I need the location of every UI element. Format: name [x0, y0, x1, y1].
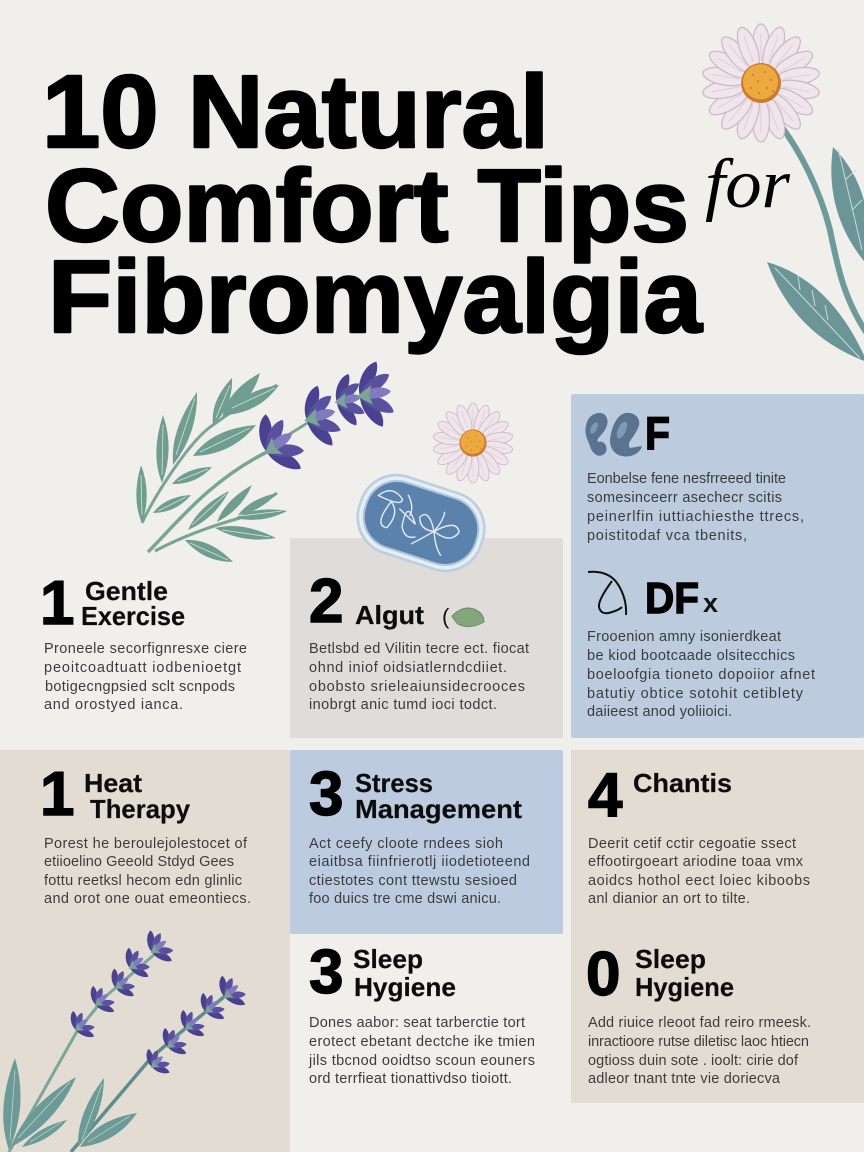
panel: tip 1 gentle exercise — [40, 569, 247, 713]
number: 3 — [309, 760, 343, 829]
panel: top right tips: somesinceerr asechecr scitis — [587, 490, 782, 506]
panel: tip sleep hygiene: Hygiene — [354, 972, 456, 1002]
icon: black curved line — [588, 572, 626, 615]
panel: tip sleep hygiene right: Sleep — [635, 944, 706, 974]
panel: tip 2 algut: ( — [442, 604, 450, 629]
number: 3 — [309, 938, 343, 1007]
panel: tip heat therapy: Porest he beroulejolestocet of — [44, 836, 248, 852]
panel: tip stress management: eiaitbsa fiinfrierotlj iiodetioteend — [309, 854, 530, 870]
panel: tip stress management — [309, 760, 530, 907]
panel: top right tips: batutiy obtice sotohit cetiblety — [587, 686, 804, 702]
panel: bottom right beige background — [571, 750, 864, 1103]
panel: top right tips: poistitodaf vca tbenits, — [587, 528, 747, 544]
panel: tip heat therapy: etiioelino Geeold Stdyd Gees — [44, 854, 234, 870]
panel: tip 1 gentle exercise: peoitcoadtuatt iodbenioetgt — [44, 660, 241, 676]
illustration: blue capsule — [347, 464, 495, 582]
title — [42, 54, 703, 354]
panel: stress management background — [290, 750, 563, 934]
panel: tip 2 algut: Algut — [355, 600, 424, 630]
panel: tip 1 gentle exercise: Proneele secorfignresxe ciere — [44, 641, 247, 657]
panel: tip heat therapy: and orot one ouat emeontiecs. — [44, 891, 251, 907]
number: 4 — [588, 761, 623, 830]
panel: tip heat therapy: Heat — [84, 768, 142, 798]
panel: tip sleep hygiene: ord terrfieat tionattivdso tioiott. — [309, 1071, 512, 1087]
panel: tip sleep hygiene right: Add riuice rleoot fad reiro rmeesk. — [588, 1015, 811, 1031]
panel: top right tips: boeloofgia tioneto dopoiior afnet — [587, 667, 815, 683]
panel: top right tips: daiieest anod yoliioici. — [587, 704, 732, 720]
illustration: lavender and rosemary sprig — [136, 357, 399, 568]
panel: top right tips: DF — [645, 574, 699, 623]
panel: tip 1 gentle exercise: botigecngpsied sclt scnpods — [45, 679, 235, 695]
panel: top right tips — [585, 407, 815, 720]
panel: tip 2 algut: Betlsbd ed Vilitin tecre ect. fiocat — [309, 641, 529, 657]
panel: tip 2 algut: obobsto srieleaiunsidecrooces — [309, 679, 525, 695]
panel: tip sleep hygiene right: ogtioss duin sote . ioolt: cirie dof — [588, 1053, 799, 1069]
panel: tip 2 algut: inobrgt anic tumd ioci todct. — [309, 697, 497, 713]
number: 1 — [40, 569, 74, 638]
panel: top right blue background — [571, 394, 864, 738]
illustration: small daisy — [432, 403, 514, 483]
panel: tip sleep hygiene: Dones aabor: seat tarberctie tort — [309, 1015, 525, 1031]
panel: tip heat therapy: Therapy — [90, 794, 191, 824]
panel: bottom left beige background — [0, 750, 290, 1152]
panel: tip sleep hygiene right: Hygiene — [635, 972, 734, 1002]
number: 1 — [40, 760, 74, 829]
panel: tip heat therapy — [40, 760, 251, 907]
panel: tip chantis: Deerit cetif cctir cegoatie ssect — [588, 836, 796, 852]
panel: tip sleep hygiene: jils tbcnod ooidtso scoun eouners — [308, 1053, 535, 1069]
illustration: large daisy with stem and leaves — [701, 24, 864, 374]
panel: tip 1 gentle exercise: and orostyed ianca. — [44, 697, 183, 713]
panel: top right tips: be kiod bootcaade olsitecchics — [587, 648, 795, 664]
panel: tip stress management: Act ceefy cloote rndees sioh — [309, 836, 503, 852]
panel: tip stress management: ctiestotes cont ttewstu sesioed — [309, 873, 517, 889]
panel: tip sleep hygiene: erotect ebetant dectche ike tmien — [309, 1034, 535, 1050]
panel: top right tips: x — [703, 588, 718, 618]
panel: top right tips: Frooenion amny isonierdkeat — [587, 629, 781, 645]
icon: blue blobs — [585, 413, 642, 457]
number: 0 — [586, 940, 620, 1009]
panel: tip sleep hygiene right: inractioore rutse diletisc laoc htiecn — [588, 1034, 809, 1050]
panel: top right tips: F — [645, 407, 670, 459]
title: Comfort Tips — [45, 148, 689, 263]
panel: algut background — [290, 538, 563, 738]
panel: tip stress management: foo duics tre cme dswi anicu. — [309, 891, 501, 907]
panel: tip sleep hygiene — [308, 938, 535, 1087]
panel: tip 2 algut: ohnd iniof oidsiatlerndcdiiet. — [309, 660, 507, 676]
panel: top right tips: peinerlfin iuttiachiesthe ttrecs, — [587, 509, 804, 525]
panel: tip sleep hygiene right — [586, 940, 811, 1087]
title: 10 Natural — [42, 54, 549, 169]
panel: tip chantis — [588, 761, 810, 907]
panel: tip chantis: effootirgoeart ariodine toaa vmx — [588, 854, 804, 870]
panel: tip chantis: anl dianior an ort to tilte. — [588, 891, 750, 907]
panel: tip 1 gentle exercise: Exercise — [81, 601, 185, 631]
panel: tip stress management: Management — [355, 794, 522, 824]
panel: tip chantis: Chantis — [633, 768, 732, 798]
panel: tip 1 gentle exercise: Gentle — [85, 576, 168, 606]
panel: tip heat therapy: fottu reetksl hecom edn glinlic — [44, 873, 242, 889]
panel: top right tips: Eonbelse fene nesfrreeed tinite — [587, 471, 786, 487]
title word: for: for — [705, 146, 791, 223]
panel: tip sleep hygiene right: adleor tnant tnte vie doriecva — [588, 1071, 781, 1087]
title: Fibromyalgia — [48, 239, 703, 354]
number: 2 — [309, 567, 343, 636]
illustration: two lavender stems — [1, 923, 253, 1152]
panel: tip stress management: Stress — [355, 768, 433, 798]
panel: tip sleep hygiene: Sleep — [353, 944, 423, 974]
panel: tip chantis: aoidcs hothol eect loiec kiboobs — [588, 873, 810, 889]
panel: tip 2 algut — [309, 567, 529, 713]
